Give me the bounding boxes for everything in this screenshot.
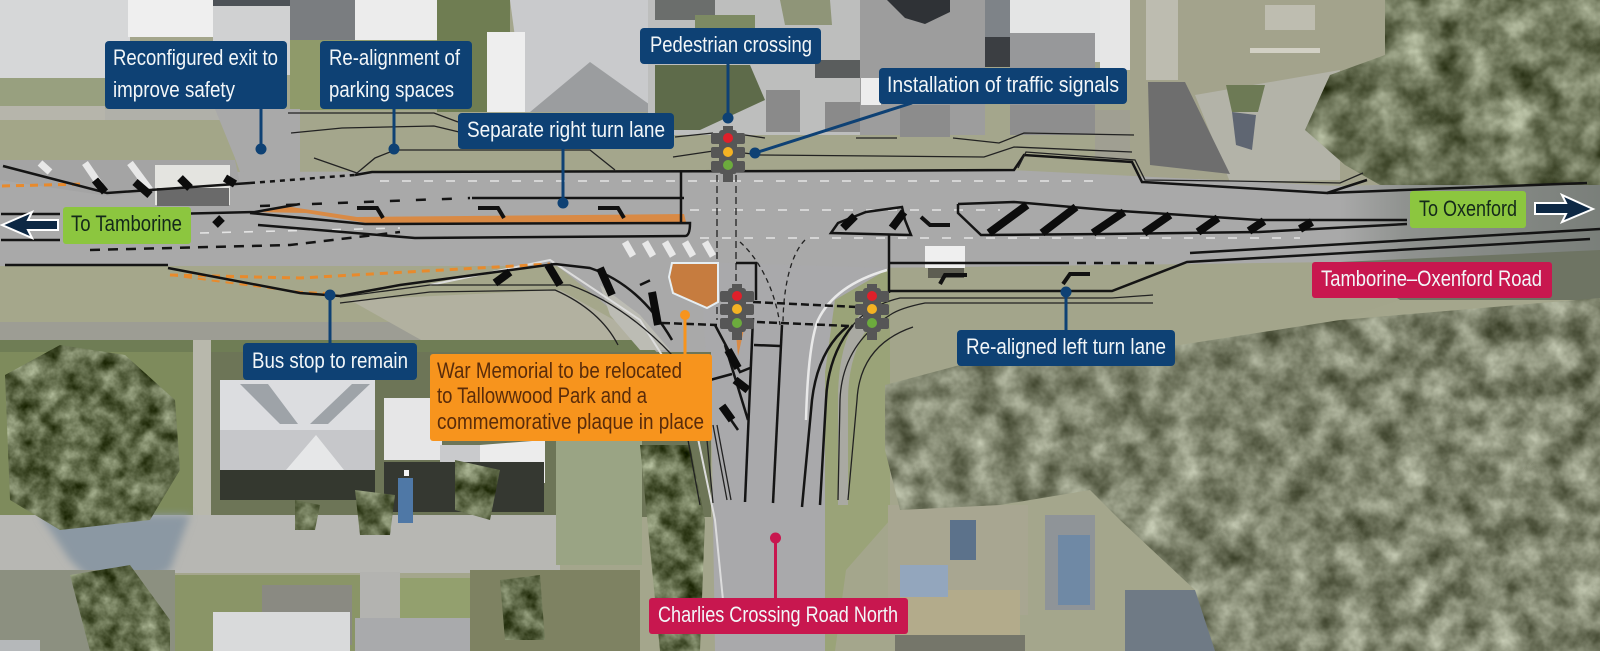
shaded verge east end [1340,250,1600,300]
arrow and label: To Oxenford: To Oxenford [1419,196,1517,221]
traffic light: north [711,126,745,182]
callout: reconfigured exit: Reconfigured exit to [113,45,278,70]
label: Tamborine–Oxenford Road [1312,262,1552,298]
callout: war memorial: commemorative plaque in place [437,409,704,434]
callout: bus stop to remain: Bus stop to remain [252,348,408,373]
callout: parking spaces: Re-alignment of [329,45,461,70]
pedestrian crossing stripes [40,163,713,256]
shaded road east end [1340,180,1600,262]
callout: war memorial: to Tallowwood Park and a [437,383,648,408]
top-left commercial buildings [0,0,437,172]
callout: installation of traffic signals: Installation of traffic signals [887,72,1119,97]
trees south-west [5,345,705,651]
hatching on islands [95,178,1312,420]
south-west lots [0,340,711,651]
callout: war memorial [430,310,712,441]
callout: bus stop to remain [243,290,417,380]
callout: reconfigured exit [105,41,287,154]
arrow and label: To Tamborine [2,207,191,244]
south-west road wedge [555,264,722,450]
callout: reconfigured exit: improve safety [113,77,235,102]
callout: separate right turn lane: Separate right turn lane [467,117,665,142]
southern verge [0,262,1400,385]
north-south road [700,262,890,651]
callout: pedestrian crossing [640,28,821,124]
south-west footpath [600,285,670,350]
road apron at north-west [0,160,240,196]
label: Charlies Crossing Road North [649,532,908,634]
parked truck [155,165,230,206]
callout: separate right turn lane [458,113,674,208]
turn arrows [357,208,1090,284]
traffic light: south-east [855,284,889,340]
house south-east [888,505,1215,651]
green verge east of side road [825,268,890,651]
church roof and central buildings [437,0,1150,160]
callout: parking spaces [320,41,472,154]
tree canopy north-east [1305,0,1600,185]
callout: re-aligned left turn lane [957,286,1175,366]
callout: installation of traffic signals [750,68,1127,158]
main east-west road [0,162,1600,268]
label: Charlies Crossing Road North: Charlies Crossing Road North [658,602,898,627]
arrow and label: To Oxenford [1410,191,1593,228]
footpath east of side road [838,312,875,505]
parked van [925,246,965,278]
war memorial site [669,263,718,308]
orange construction lines [2,184,686,293]
dry ground top-right [1130,0,1410,185]
callout: war memorial: War Memorial to be relocated [437,358,682,383]
tree canopy south-east [885,298,1600,651]
callout: parking spaces: parking spaces [329,77,454,102]
arrow and label: To Tamborine: To Tamborine [71,211,182,236]
traffic light: south-west [720,284,754,340]
callout: re-aligned left turn lane: Re-aligned left turn lane [966,334,1166,359]
label: Tamborine–Oxenford Road: Tamborine–Oxenford Road [1321,266,1542,291]
callout: pedestrian crossing: Pedestrian crossing [650,32,812,57]
road markings [40,163,1300,620]
houses south of road [220,380,545,523]
design kerb lines [1,113,1600,507]
